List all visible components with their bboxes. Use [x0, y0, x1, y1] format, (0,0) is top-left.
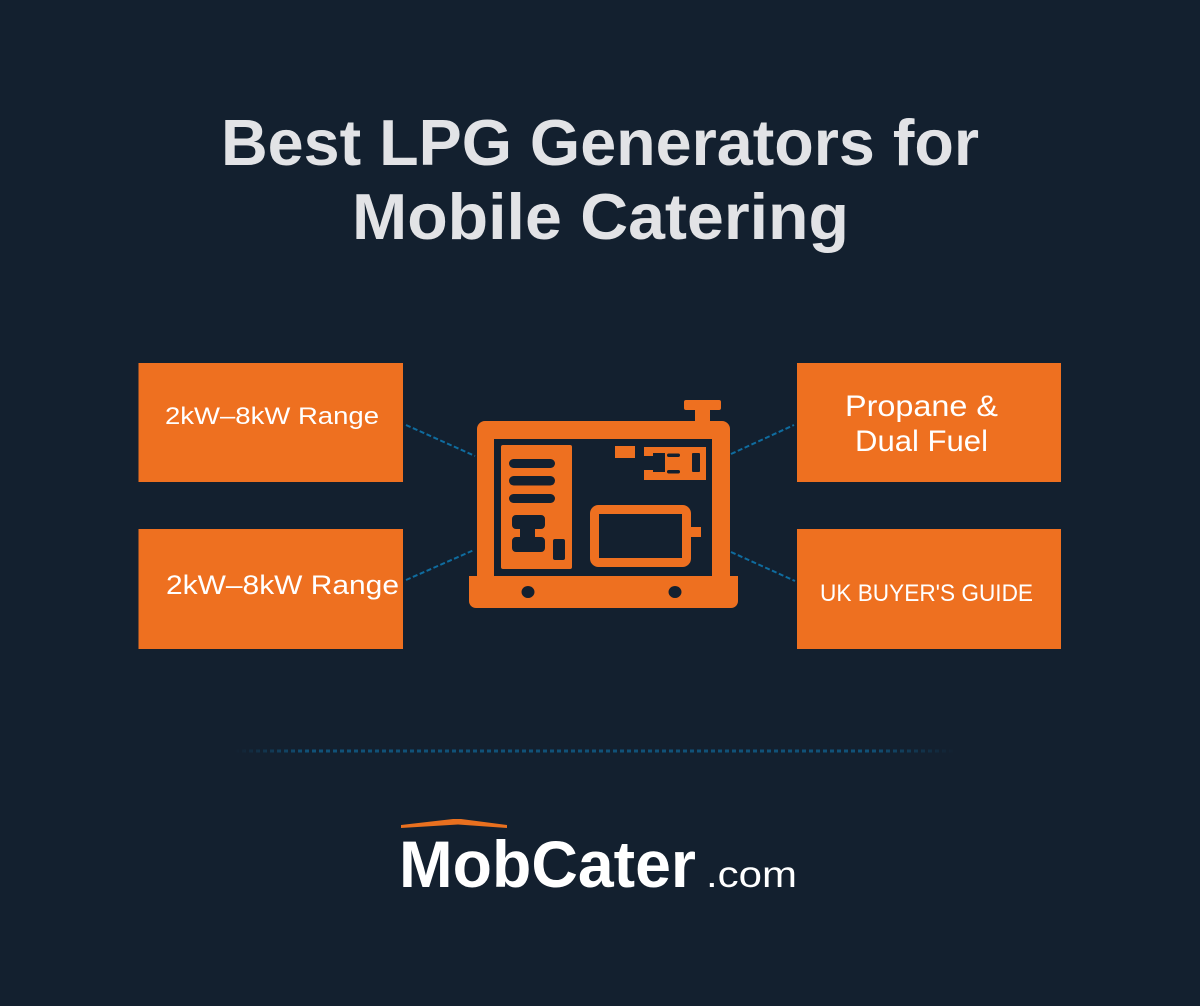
panel: bottom-right feature: UK BUYER'S GUIDE — [820, 580, 1033, 607]
logo: .com — [706, 854, 797, 895]
base with feet holes — [469, 576, 738, 608]
panel: top-right feature: Propane & — [845, 390, 998, 423]
panel: top-left feature: 2kW–8kW Range — [165, 403, 379, 430]
title: Best LPG Generators for — [221, 106, 979, 179]
logo — [399, 819, 797, 901]
battery — [594, 510, 701, 562]
icon: generator — [469, 400, 738, 608]
exhaust cap — [684, 400, 721, 421]
roof mark — [401, 819, 507, 828]
divider — [235, 750, 955, 752]
small indicator — [615, 446, 635, 458]
panel: bottom-right feature — [797, 529, 1061, 649]
panel: top-right feature — [797, 363, 1061, 482]
title — [221, 106, 979, 253]
control panel — [501, 445, 572, 569]
panel: bottom-left feature — [138, 529, 403, 649]
panel: bottom-left feature: 2kW–8kW Range — [166, 570, 399, 600]
engine part — [644, 447, 706, 480]
logo: MobCater — [399, 827, 696, 901]
housing frame — [477, 421, 730, 578]
title: Mobile Catering — [352, 180, 849, 253]
connector lines — [406, 425, 795, 581]
panel: top-right feature: Dual Fuel — [855, 425, 988, 458]
panel: top-left feature — [138, 363, 403, 482]
